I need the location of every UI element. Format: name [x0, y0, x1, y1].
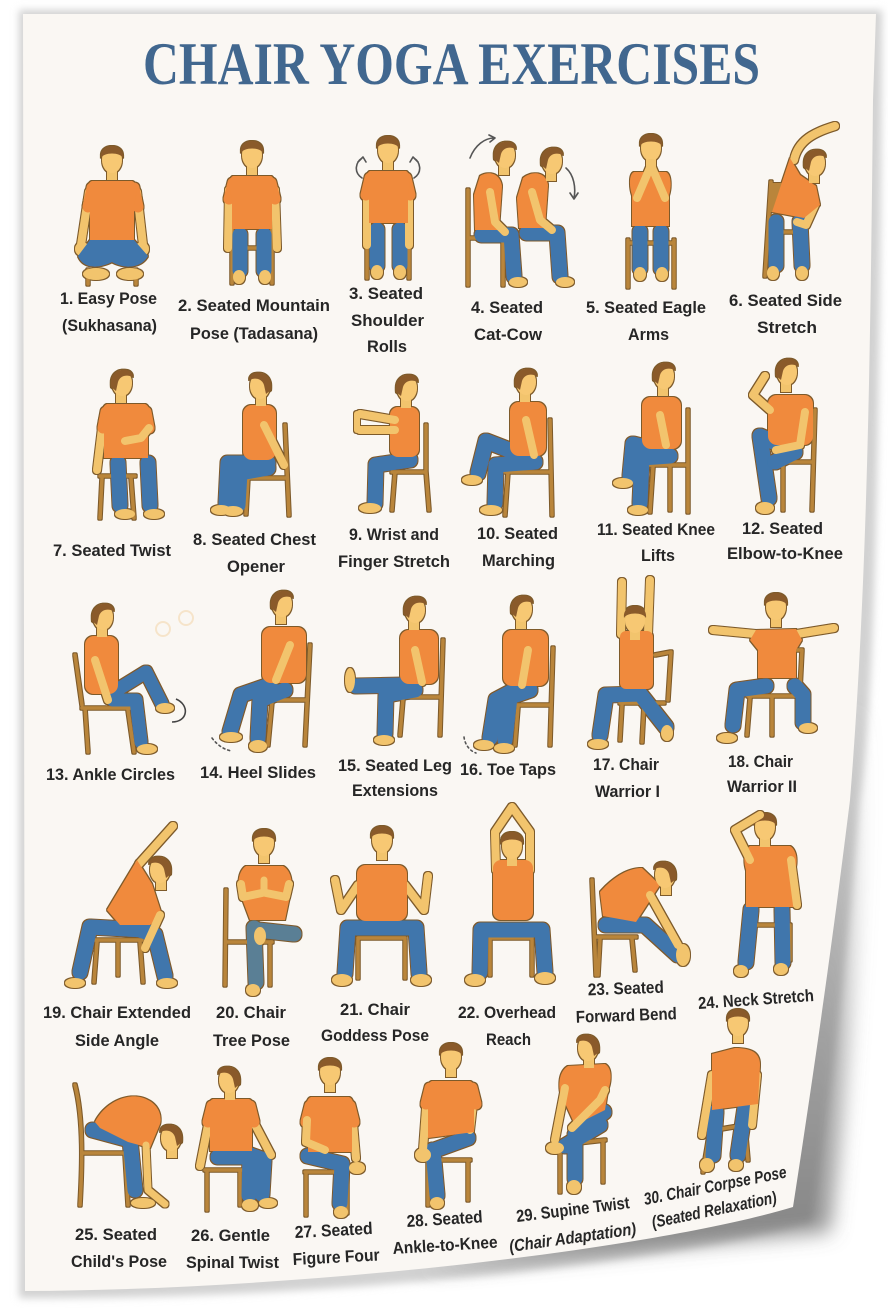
figure 10 — [462, 369, 552, 515]
pose 17: Chair Warrior I — [588, 580, 673, 801]
pose 23: Seated Forward Bend — [576, 862, 690, 1027]
label 22 — [458, 1003, 556, 1049]
label 15: Extensions — [352, 781, 438, 800]
label 17: Warrior I — [595, 782, 660, 801]
label 9: 9. Wrist and — [349, 525, 439, 544]
figure 5 — [628, 134, 674, 287]
label 23 — [576, 978, 677, 1027]
label 27 — [292, 1219, 380, 1269]
figure 2 — [228, 141, 277, 284]
label 9 — [338, 525, 450, 571]
figure 21 — [332, 826, 431, 986]
label 3 — [349, 284, 424, 356]
label 27: 27. Seated — [294, 1219, 373, 1242]
figure 8 — [211, 373, 289, 516]
title: CHAIR YOGA EXERCISES — [143, 31, 760, 97]
label 2 — [178, 296, 330, 343]
pose 7: Seated Twist — [53, 370, 171, 560]
pose 24: Neck Stretch — [697, 813, 814, 1013]
label 10 — [477, 524, 558, 570]
tap marks — [464, 737, 476, 753]
figure 14 — [220, 591, 310, 752]
figure 11 — [613, 363, 688, 515]
figure 19 — [65, 826, 177, 988]
label 15: 15. Seated Leg — [338, 756, 452, 775]
label 9: Finger Stretch — [338, 552, 450, 571]
label 3: Rolls — [367, 337, 407, 356]
pose 1: Easy Pose — [60, 146, 157, 335]
pose 22: Overhead Reach — [458, 807, 556, 1049]
label 10: Marching — [482, 551, 555, 570]
pose 3: Seated Shoulder Rolls — [349, 136, 424, 356]
figure 23 — [592, 862, 690, 975]
figure 7 — [97, 370, 164, 519]
pose 11: Seated Knee Lifts — [597, 363, 715, 565]
pose 2: Seated Mountain Pose — [178, 141, 330, 343]
figure 25 — [75, 1085, 182, 1208]
label 29: 29. Supine Twist — [515, 1193, 631, 1226]
label 13: 13. Ankle Circles — [46, 765, 175, 784]
label 30: (Seated Relaxation) — [650, 1188, 779, 1232]
label 22: 22. Overhead — [458, 1003, 556, 1022]
label 1: (Sukhasana) — [62, 316, 157, 335]
figure 28 — [415, 1043, 476, 1209]
pose 25: Seated Child's Pose — [71, 1085, 182, 1271]
figure 16 — [474, 596, 553, 753]
label 18: Warrior II — [727, 777, 797, 796]
label 26: 26. Gentle — [191, 1226, 270, 1245]
figure 20 — [225, 829, 294, 996]
label 2: Pose (Tadasana) — [190, 324, 318, 343]
label 1: 1. Easy Pose — [60, 289, 157, 308]
pose 29: Supine Twist — [508, 1035, 638, 1256]
pose 14: Heel Slides — [200, 591, 316, 782]
figure 6 — [765, 126, 835, 280]
figure 29 — [546, 1035, 611, 1194]
pose 28: Seated Ankle-to-Knee — [392, 1043, 498, 1258]
pose 26: Gentle Spinal Twist — [186, 1067, 279, 1272]
figure 4 right — [517, 148, 574, 287]
figure 24 — [734, 813, 797, 977]
label 5: Arms — [628, 325, 669, 344]
pose 16: Toe Taps — [460, 596, 556, 779]
label 7: 7. Seated Twist — [53, 541, 171, 560]
label 26: Spinal Twist — [186, 1253, 279, 1272]
figure 9 — [357, 375, 429, 513]
label 11: Lifts — [641, 546, 675, 565]
faint watermark — [156, 611, 193, 636]
label 30: 30. Chair Corpse Pose — [642, 1163, 788, 1209]
figure 27 — [305, 1058, 365, 1218]
label 12: Elbow-to-Knee — [727, 544, 843, 563]
label 24: 24. Neck Stretch — [697, 986, 814, 1013]
label 8 — [193, 530, 316, 576]
pose 6: Seated Side Stretch — [729, 126, 842, 337]
label 22: Reach — [486, 1030, 531, 1049]
label 21 — [321, 1000, 429, 1045]
pose 10: Seated Marching — [462, 369, 558, 570]
figure 12 — [753, 359, 815, 514]
label 6: 6. Seated Side — [729, 291, 842, 310]
label 15 — [338, 756, 452, 800]
ankle circle arrow — [172, 699, 185, 722]
label 20 — [213, 1003, 290, 1050]
label 18: 18. Chair — [728, 752, 793, 771]
slide marks — [212, 738, 232, 751]
pose 19: Chair Extended Side Angle — [43, 826, 191, 1050]
label 12 — [727, 519, 843, 563]
label 4: Cat-Cow — [474, 325, 543, 344]
pose 8: Seated Chest Opener — [193, 373, 316, 576]
pose 20: Chair Tree Pose — [213, 829, 294, 1050]
label 17 — [593, 755, 660, 801]
label 4 — [471, 298, 543, 344]
figure 22 — [465, 807, 555, 986]
figure 18 — [713, 593, 834, 743]
label 20: 20. Chair — [216, 1003, 286, 1022]
label 19 — [43, 1003, 191, 1050]
figure 30 — [700, 1009, 760, 1172]
figure 4 left — [468, 142, 527, 287]
label 25: 25. Seated — [75, 1225, 157, 1244]
label 12: 12. Seated — [742, 519, 823, 538]
label 19: 19. Chair Extended — [43, 1003, 191, 1022]
label 28: 28. Seated — [406, 1207, 483, 1231]
rotation arrows — [356, 157, 420, 178]
figure 15 — [345, 597, 443, 745]
figure 17 — [588, 580, 673, 749]
label 2: 2. Seated Mountain — [178, 296, 330, 315]
label 8: Opener — [227, 557, 285, 576]
label 3: Shoulder — [351, 311, 424, 330]
label 1 — [60, 289, 157, 335]
pose 12: Seated Elbow-to-Knee — [727, 359, 843, 563]
label 18 — [727, 752, 797, 796]
label 26 — [186, 1226, 279, 1272]
label 14: 14. Heel Slides — [200, 763, 316, 782]
pose 13: Ankle Circles — [46, 604, 193, 784]
figure 3 — [366, 136, 410, 279]
label 21: Goddess Pose — [321, 1026, 429, 1045]
label 25: Child's Pose — [71, 1252, 167, 1271]
label 8: 8. Seated Chest — [193, 530, 316, 549]
pose 15: Seated Leg Extensions — [338, 597, 452, 800]
movement arrows — [470, 135, 578, 199]
label 27: Figure Four — [292, 1245, 380, 1269]
figure 26 — [200, 1067, 277, 1211]
label 6: Stretch — [757, 318, 817, 337]
label 11 — [597, 520, 715, 565]
pose 9: Wrist and Finger Stretch — [338, 375, 450, 571]
paper shadow dark — [420, 700, 866, 1270]
label 29: (Chair Adaptation) — [508, 1219, 638, 1256]
pose 18: Chair Warrior II — [713, 593, 834, 796]
label 21: 21. Chair — [340, 1000, 410, 1019]
label 16: 16. Toe Taps — [460, 760, 556, 779]
label 28: Ankle-to-Knee — [392, 1233, 498, 1258]
label 25 — [71, 1225, 167, 1271]
figure 13 — [75, 604, 174, 754]
label 29 — [508, 1193, 638, 1256]
label 4: 4. Seated — [471, 298, 543, 317]
label 11: 11. Seated Knee — [597, 520, 715, 539]
pose 4: Seated Cat-Cow — [468, 135, 578, 344]
pose 30: Chair Corpse Pose — [642, 1009, 788, 1232]
label 28 — [392, 1207, 498, 1258]
label 17: 17. Chair — [593, 755, 659, 774]
pose 21: Chair Goddess Pose — [321, 826, 431, 1045]
pose 27: Seated Figure Four — [292, 1058, 380, 1269]
figure 1 — [75, 146, 149, 284]
label 20: Tree Pose — [213, 1031, 290, 1050]
label 23: 23. Seated — [587, 978, 664, 999]
label 19: Side Angle — [75, 1031, 159, 1050]
label 6 — [729, 291, 842, 337]
label 5: 5. Seated Eagle — [586, 298, 706, 317]
label 23: Forward Bend — [576, 1004, 677, 1027]
pose 5: Seated Eagle Arms — [586, 134, 706, 344]
label 10: 10. Seated — [477, 524, 558, 543]
label 3: 3. Seated — [349, 284, 423, 303]
label 5 — [586, 298, 706, 344]
label 30 — [642, 1163, 788, 1232]
